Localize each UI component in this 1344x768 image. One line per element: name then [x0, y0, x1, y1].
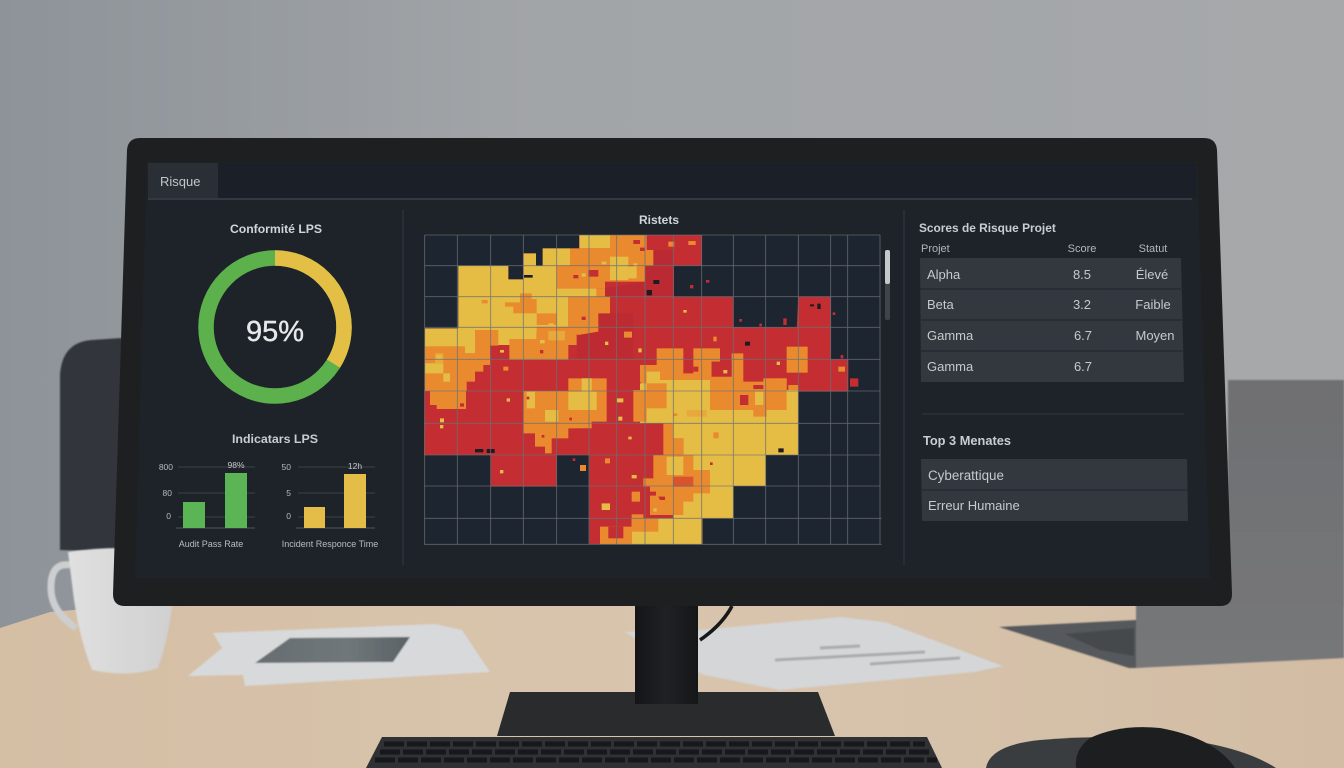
table body: Gamma [927, 328, 974, 343]
heatmap grid lines [424, 235, 882, 544]
orange zones top [557, 235, 653, 288]
threats list: Cyberattique [928, 468, 1004, 483]
office chair [60, 338, 122, 552]
threats list: Erreur Humaine [928, 498, 1020, 513]
centre column lower [633, 423, 663, 515]
monitor stand [497, 600, 835, 736]
panel: risk heatmap [424, 213, 890, 544]
table body [920, 258, 1184, 382]
heatmap cell specks [437, 262, 780, 512]
heading: Top 3 Menates: Top 3 Menates [923, 433, 1011, 448]
bar chart: incident response time: 12h [348, 461, 362, 471]
monitor cable [700, 606, 732, 640]
keyboard [366, 737, 942, 768]
table body: 8.5 [1073, 267, 1091, 282]
heatmap [424, 235, 882, 544]
bar chart: audit pass rate [159, 460, 255, 549]
table header [921, 243, 1167, 255]
panel: LPS indicators [159, 432, 378, 549]
heading: Conformité LPS: Conformité LPS [230, 222, 322, 236]
panel: top 3 threats [921, 433, 1188, 521]
table body: Gamma [927, 359, 974, 374]
table body: Faible [1135, 297, 1171, 312]
table body: Beta [927, 297, 955, 312]
papers on the right of the stand [625, 617, 1003, 690]
tab bar: Risque [160, 174, 200, 189]
heading: Ristets: Ristets [639, 213, 679, 227]
panel: project risk scores [919, 221, 1184, 382]
dashboard screen [135, 162, 1210, 578]
monitor bezel [113, 138, 1232, 606]
bar chart: incident response time: 5 [286, 488, 291, 498]
scrollbar [885, 250, 890, 320]
bar chart: audit pass rate: 0 [166, 511, 171, 521]
bar chart: audit pass rate: 800 [159, 462, 173, 472]
donut chart 95% [206, 258, 344, 396]
table body: Alpha [927, 267, 961, 282]
papers on the left of the stand [188, 624, 490, 686]
table header: Score [1068, 243, 1096, 255]
bar chart: audit pass rate: 80 [163, 488, 172, 498]
table body: 3.2 [1073, 297, 1091, 312]
bar chart: incident response time: 50 [282, 462, 291, 472]
heading: Indicatars LPS: Indicatars LPS [232, 432, 318, 446]
table header: Statut [1139, 243, 1167, 255]
orange zones left [425, 330, 498, 391]
mouse pad and mouse [986, 727, 1276, 768]
bar chart: incident response time [282, 461, 378, 549]
orange zone centre [523, 378, 607, 453]
table body: 6.7 [1074, 328, 1092, 343]
threats list [921, 459, 1188, 521]
donut chart 95%: 95% [246, 316, 304, 348]
table body: 6.7 [1074, 359, 1092, 374]
bar chart: incident response time: 0 [286, 511, 291, 521]
panel: LPS compliance [206, 222, 344, 396]
yellow zone right [632, 372, 798, 544]
bar chart: audit pass rate: Audit Pass Rate [179, 539, 243, 549]
table body: Moyen [1135, 328, 1175, 343]
bar chart: audit pass rate: 98% [227, 460, 245, 470]
yellow zone top-left [425, 248, 597, 353]
laptop on desk [999, 380, 1344, 668]
table header: Projet [921, 243, 950, 255]
desk surface [0, 606, 1344, 768]
bar chart: incident response time: Incident Responce Time [282, 539, 378, 549]
heading: Scores de Risque Projet: Scores de Risque Projet [919, 221, 1056, 235]
orange zones right [640, 348, 787, 392]
coffee mug [51, 548, 172, 674]
table body: Élevé [1136, 267, 1168, 282]
tab bar [148, 163, 1196, 198]
